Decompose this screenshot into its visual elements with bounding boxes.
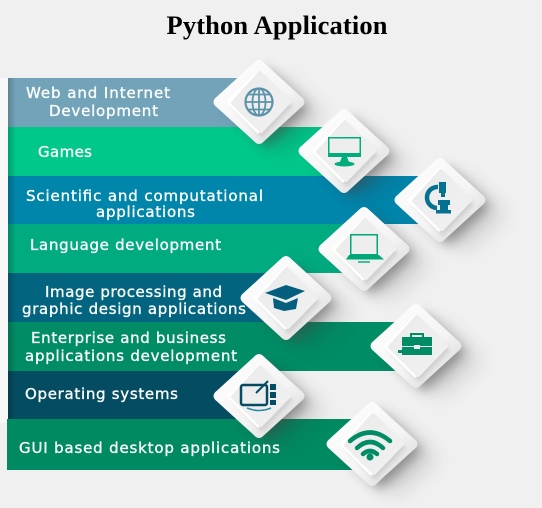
label: scientific: applications bbox=[96, 203, 195, 221]
label: image: Image processing and bbox=[45, 283, 222, 301]
bar: GUI bbox=[7, 419, 352, 470]
label: image bbox=[22, 283, 246, 318]
label: GUI: GUI based desktop applications bbox=[19, 439, 280, 457]
bar: scientific bbox=[8, 176, 420, 224]
label: enterprise: Enterprise and business bbox=[31, 329, 226, 347]
bar: language bbox=[8, 224, 353, 273]
icon: microscope bbox=[427, 182, 451, 214]
title: Python Application bbox=[166, 10, 388, 40]
tile: microscope bbox=[400, 163, 506, 252]
bar: web bbox=[8, 78, 263, 127]
label: scientific bbox=[26, 187, 263, 221]
tile: wifi bbox=[332, 407, 438, 496]
labels on bars bbox=[19, 84, 280, 457]
icon: monitor bbox=[328, 137, 361, 166]
label: operating systems: Operating systems bbox=[25, 385, 178, 403]
icon: graduation cap bbox=[265, 285, 305, 311]
icon: wifi bbox=[350, 432, 390, 460]
tile: laptop bbox=[324, 212, 430, 301]
label: scientific: Scientific and computational bbox=[26, 187, 263, 205]
left margin strip bbox=[0, 78, 8, 423]
icon: laptop bbox=[346, 234, 384, 263]
icon: briefcase bbox=[398, 333, 432, 355]
label: enterprise: applications development bbox=[25, 347, 237, 365]
icon: globe bbox=[246, 88, 272, 116]
label: games: Games bbox=[38, 143, 92, 161]
bar: games bbox=[8, 127, 333, 176]
label: image: graphic design applications bbox=[22, 300, 246, 318]
label: web: Development bbox=[49, 102, 158, 120]
tile: monitor bbox=[304, 114, 410, 203]
label: web bbox=[26, 84, 170, 120]
label: web: Web and Internet bbox=[26, 84, 170, 102]
tile: tablet bbox=[218, 359, 325, 448]
icon tiles with icons bbox=[218, 65, 506, 496]
tile: briefcase bbox=[376, 309, 482, 398]
bar: enterprise bbox=[8, 322, 403, 371]
panel: stacked colour bars bbox=[7, 78, 420, 470]
label: language: Language development bbox=[30, 236, 221, 254]
bar: image bbox=[8, 273, 293, 322]
bar: operating systems bbox=[8, 371, 263, 420]
tile: graduation cap bbox=[246, 261, 352, 350]
left edge shading bbox=[8, 78, 16, 419]
icon: tablet bbox=[241, 381, 276, 410]
label: enterprise bbox=[25, 329, 237, 365]
tile: globe bbox=[218, 65, 325, 154]
